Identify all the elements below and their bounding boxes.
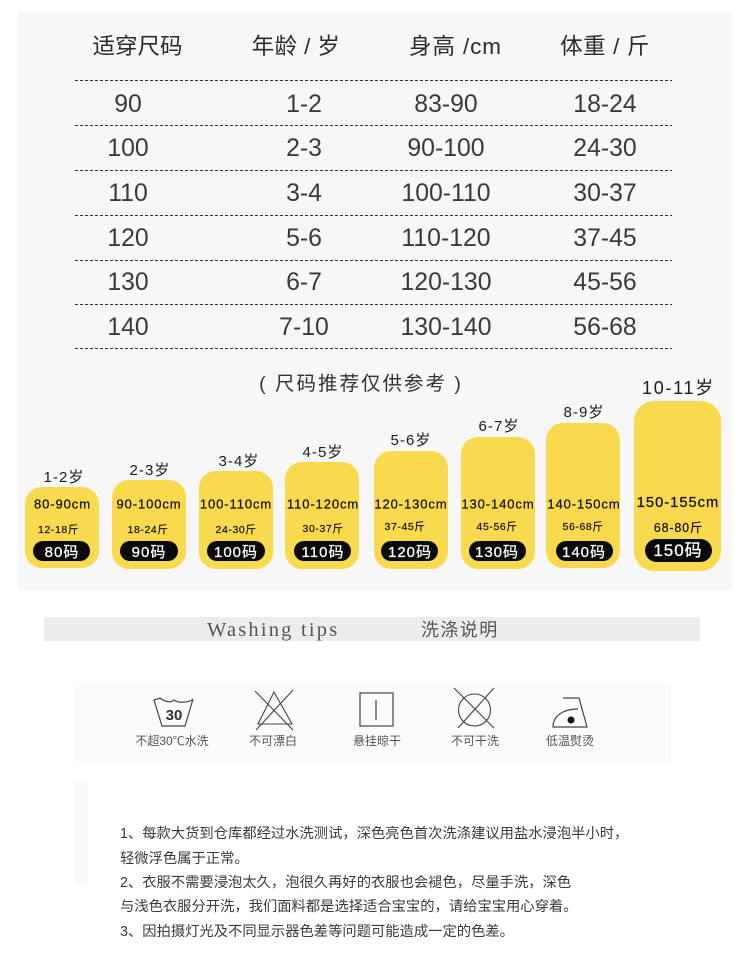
icon: do not bleach: [249, 690, 297, 748]
icon: do not bleach: 不可漂白: [249, 733, 297, 748]
table header: [92, 34, 650, 59]
size card: 110: 4-5岁: [302, 444, 344, 461]
note: size recommendation for reference only: ( 尺码推荐仅供参考 ): [259, 373, 463, 395]
table row: 90: 18-24: [573, 91, 637, 118]
icon: hang dry: 悬挂晾干: [353, 733, 401, 748]
size card: 140: 56-68斤: [563, 521, 603, 533]
table row: 140: 140: [107, 314, 149, 341]
table row: 120: 37-45: [573, 225, 637, 252]
table row: 100: 2-3: [286, 135, 322, 162]
table row: 130: 6-7: [286, 269, 322, 296]
size card: 140: 8-9岁: [563, 404, 605, 421]
table row: 140: [107, 314, 637, 341]
size card: 110: 110码: [302, 544, 344, 561]
table row: 140: 56-68: [573, 314, 637, 341]
size card: 140: 140码: [562, 544, 606, 561]
size card: 80: 80-90cm: [34, 496, 91, 512]
table row: 100: [107, 135, 637, 162]
table row: 130: 130: [107, 269, 149, 296]
table header: 适穿尺码: [92, 34, 183, 59]
table row: 120: 110-120: [401, 225, 491, 252]
table row: 130: 120-130: [400, 269, 492, 296]
size card: 120: 120-130cm: [374, 496, 448, 512]
size card: 120: 120码: [388, 544, 432, 561]
size card: 90: [112, 462, 186, 569]
size card: 110: 30-37斤: [303, 523, 343, 535]
size card: 90: 90码: [132, 544, 166, 561]
size card: 80: 80码: [45, 544, 79, 561]
size card: 140: 140-150cm: [547, 496, 621, 512]
text block: washing instructions: 轻微浮色属于正常。: [120, 850, 249, 867]
table row: 130: [107, 269, 637, 296]
icon: wash at 30 degrees: 30: [166, 707, 182, 724]
icon: wash at 30 degrees: [135, 698, 209, 748]
size card: 90: 2-3岁: [129, 462, 171, 479]
panel: care icons: [74, 682, 671, 762]
size card: 100: 100-110cm: [200, 496, 272, 512]
table row: 120: 120: [107, 225, 149, 252]
decorative faint strip: [74, 780, 88, 885]
size table: [75, 34, 672, 348]
table row: 140: 130-140: [400, 314, 492, 341]
table header: 年龄 / 岁: [252, 34, 340, 59]
icon: do not dry clean: [451, 688, 499, 748]
size card: 90: 18-24斤: [128, 524, 168, 536]
table row: 100: 100: [107, 135, 149, 162]
size card: 90: 90-100cm: [116, 496, 182, 512]
size card: 130: 6-7岁: [478, 418, 520, 435]
size card: 140: [546, 404, 621, 568]
table header: 身高 /cm: [409, 34, 502, 59]
size card: 100: 24-30斤: [216, 524, 256, 536]
table row: 110: 30-37: [573, 180, 637, 207]
size card: 110: 110-120cm: [287, 496, 359, 512]
table header: 体重 / 斤: [560, 34, 650, 59]
size card: 80: 12-18斤: [38, 524, 79, 536]
size card: 100: 100码: [214, 544, 258, 561]
size card: 80: 1-2岁: [43, 469, 85, 486]
icon: low temperature iron: 低温熨烫: [546, 734, 594, 748]
text block: washing instructions: 3、因拍摄灯光及不同显示器色差等问题可能造成一定的色差。: [120, 922, 514, 940]
size card: 130: 130码: [475, 544, 519, 561]
table row: 100: 24-30: [573, 135, 637, 162]
size card: 120: [374, 432, 448, 569]
table row: 110: 3-4: [286, 180, 322, 207]
size card: 150: 150码: [653, 541, 703, 560]
table row: 120: [107, 225, 637, 252]
heading bar: washing tips: [44, 617, 700, 641]
text block: washing instructions: 1、每款大货到仓库都经过水洗测试，深色亮色首次洗涤建议用盐水浸泡半小时，: [120, 825, 628, 842]
table row: 110: 100-110: [401, 180, 491, 207]
heading bar: washing tips: 洗涤说明: [421, 620, 499, 640]
text block: washing instructions: 与浅色衣服分开洗，我们面料都是选择适合宝宝的，请给宝宝用心穿着。: [120, 898, 578, 915]
table row: 130: 45-56: [573, 269, 637, 296]
size card: 110: [285, 444, 359, 569]
size card: 150: [634, 378, 721, 571]
table row: 110: 110: [108, 180, 148, 207]
size card: 130: 45-56斤: [477, 521, 517, 533]
icon: do not dry clean: 不可干洗: [451, 734, 499, 748]
panel: size chart background: [18, 12, 732, 590]
size card: 100: [199, 453, 273, 569]
icon: hang dry: [353, 693, 401, 748]
table row: 120: 5-6: [286, 225, 322, 252]
size card: 120: 5-6岁: [390, 432, 432, 449]
icon: wash at 30 degrees: 不超30℃水洗: [135, 733, 209, 748]
text block: washing instructions: [120, 825, 628, 940]
heading bar: washing tips: Washing tips: [207, 619, 339, 641]
table row: 140: 7-10: [279, 314, 329, 341]
size card: 120: 37-45斤: [385, 521, 425, 533]
size card: 130: [461, 418, 535, 569]
size card: 150: 68-80斤: [654, 521, 703, 535]
table row: 110: [108, 180, 637, 207]
text block: washing instructions: 2、衣服不需要浸泡太久，泡很久再好的衣服也会褪色，尽量手洗，深色: [120, 874, 571, 891]
size card: 150: 10-11岁: [642, 378, 715, 398]
icon: low temperature iron: [546, 698, 594, 748]
size card: 150: 150-155cm: [637, 495, 719, 511]
table row: 90: 1-2: [286, 91, 322, 118]
size card: 130: 130-140cm: [461, 496, 535, 512]
table row: 90: [114, 91, 637, 118]
size card: 100: 3-4岁: [218, 453, 260, 470]
table row: 90: 90: [114, 91, 142, 118]
table row: 90: 83-90: [414, 91, 478, 118]
size card: 80: [25, 469, 99, 568]
table row: 100: 90-100: [407, 135, 485, 162]
